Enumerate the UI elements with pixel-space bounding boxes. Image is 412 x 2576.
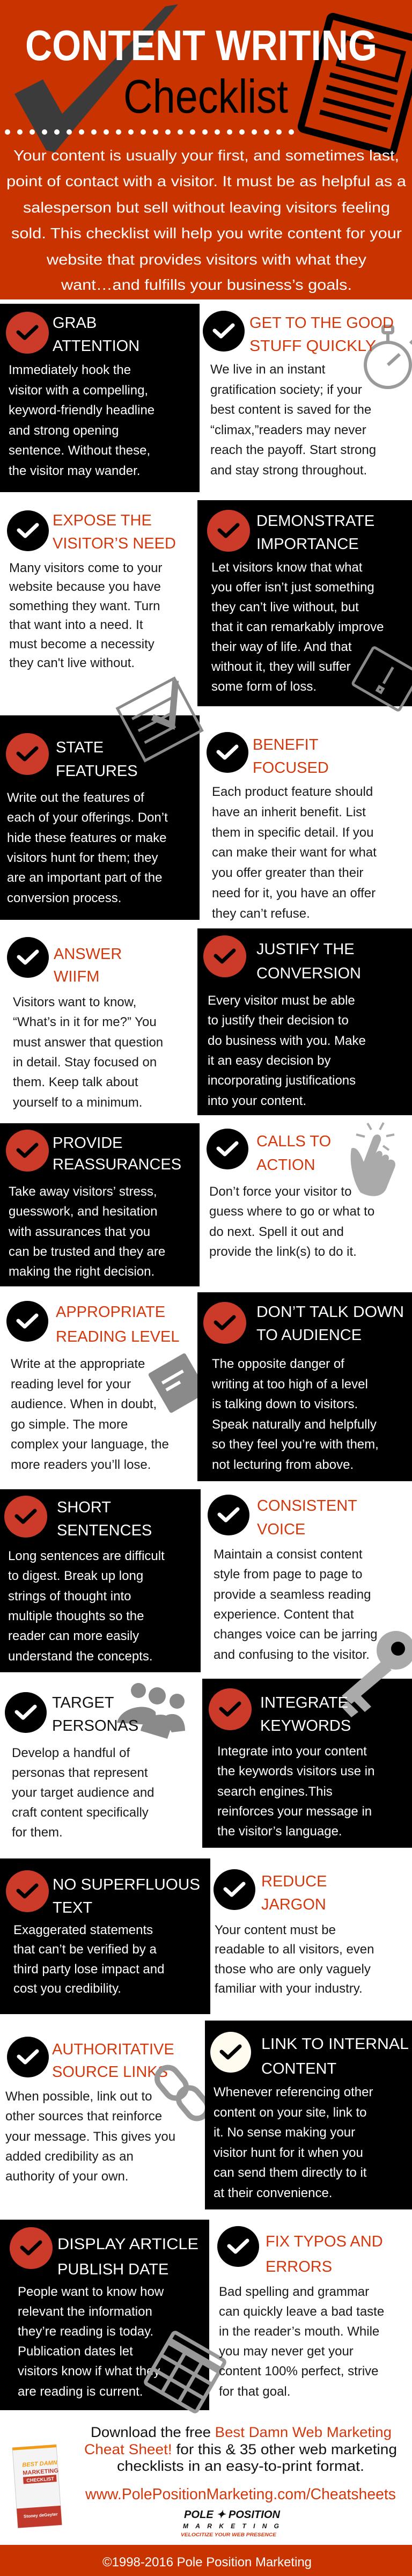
logo: VELOCITIZE YOUR WEB PRESENCE bbox=[181, 2532, 277, 2537]
panel: no superfluous text: third party lose impact and bbox=[13, 1962, 164, 1977]
panel: fix typos and errors: content 100% perfect, strive bbox=[219, 2364, 379, 2379]
panel: calls to action: Don’t force your visitor to bbox=[209, 1184, 351, 1199]
panel: answer wiifm: WIIFM bbox=[54, 968, 99, 985]
panel: fix typos and errors: FIX TYPOS AND bbox=[266, 2233, 383, 2250]
panel: answer wiifm: yourself to a minimum. bbox=[13, 1095, 142, 1110]
panel: fix typos and errors: in the reader’s mouth. While bbox=[219, 2324, 379, 2339]
panel: target personas: your target audience and bbox=[12, 1785, 154, 1800]
panel: don't talk down to audience: is talking down to visitors. bbox=[212, 1397, 358, 1411]
panel: link to internal content: LINK TO INTERNAL bbox=[261, 2036, 409, 2053]
panel: link to internal content: CONTENT bbox=[261, 2060, 336, 2077]
panel: integrate keywords: the visitor’s language. bbox=[217, 1824, 342, 1839]
panel: provide reassurances: with assurances that you bbox=[8, 1225, 150, 1239]
panel: appropriate reading level: audience. When in doubt, bbox=[11, 1397, 157, 1411]
panel: justify the conversion bbox=[197, 928, 412, 1115]
panel: state features: visitors hunt for them; they bbox=[7, 851, 158, 865]
panel: short sentences: Long sentences are difficult bbox=[8, 1549, 165, 1563]
panel: authoritative source links: authority of your own. bbox=[5, 2169, 128, 2184]
panel: short sentences: to digest. Break up long bbox=[8, 1569, 143, 1583]
intro text: want…and fulfills your business’s goals. bbox=[61, 276, 352, 293]
panel: short sentences: SHORT bbox=[57, 1499, 111, 1516]
panel: integrate keywords: the keywords visitors use in bbox=[217, 1764, 374, 1779]
panel: short sentences: SENTENCES bbox=[57, 1522, 152, 1539]
panel: reduce jargon bbox=[214, 1869, 374, 1996]
panel: state features: Write out the features of bbox=[7, 791, 144, 805]
panel: link to internal content bbox=[205, 2021, 412, 2209]
panel: don't talk down to audience bbox=[197, 1292, 412, 1481]
panel: appropriate reading level: more readers you’ll lose. bbox=[11, 1458, 151, 1472]
panel: fix typos and errors: ERRORS bbox=[266, 2258, 332, 2275]
panel: authoritative source links bbox=[5, 2037, 212, 2184]
panel: target personas: for them. bbox=[12, 1825, 63, 1840]
panel: integrate keywords: Integrate into your content bbox=[217, 1744, 367, 1759]
icon: people bbox=[117, 1683, 185, 1739]
panel: consistent voice: Maintain a consist content bbox=[214, 1547, 363, 1562]
panel: link to internal content: at their convenience. bbox=[214, 2186, 332, 2200]
panel: grab attention: sentence. Without these, bbox=[9, 443, 150, 458]
panel: demonstrate importance: DEMONSTRATE bbox=[256, 513, 374, 530]
panel: justify the conversion: to justify their decision to bbox=[208, 1013, 349, 1028]
panel: state features: each of your offerings. Don’t bbox=[7, 810, 168, 825]
panel: no superfluous text bbox=[0, 1858, 210, 2014]
panel: appropriate reading level bbox=[6, 1301, 208, 1472]
panel: display article publish date: relevant the information bbox=[18, 2304, 152, 2319]
call to action text: Download the free Best Damn Web Marketing bbox=[91, 2424, 392, 2440]
panel: appropriate reading level: complex your language, the bbox=[11, 1437, 169, 1452]
panel: benefit focused: they can’t refuse. bbox=[212, 906, 310, 921]
panel: answer wiifm bbox=[7, 937, 163, 1110]
panel: get to the good stuff quickly bbox=[203, 311, 412, 478]
intro text: website that provides visitors with what they bbox=[46, 251, 366, 268]
panel: provide reassurances: can be trusted and they are bbox=[9, 1245, 165, 1259]
intro text: sold. This checklist will help you write content for your bbox=[11, 225, 402, 241]
panel: grab attention: GRAB bbox=[53, 314, 97, 332]
icon: pointing hand bbox=[351, 1123, 395, 1196]
panel: link to internal content: Whenever referencing other bbox=[214, 2085, 373, 2099]
panel: answer wiifm: must answer that question bbox=[13, 1035, 163, 1050]
call to action text: Cheat Sheet! for this & 35 other web marketing bbox=[84, 2441, 397, 2457]
panel: appropriate reading level: go simple. The more bbox=[11, 1417, 128, 1432]
panel: integrate keywords: KEYWORDS bbox=[260, 1717, 351, 1735]
panel: benefit focused: need for it, you have an offer bbox=[212, 886, 376, 901]
panel: grab attention: and strong opening bbox=[9, 423, 119, 438]
panel: no superfluous text: cost you credibility. bbox=[13, 1981, 121, 1996]
icon: paper with check bbox=[117, 678, 202, 760]
panel: authoritative source links: other sources that reinforce bbox=[5, 2109, 162, 2124]
panel: get to the good stuff quickly: We live in an instant bbox=[210, 362, 326, 377]
panel: get to the good stuff quickly: best content is saved for the bbox=[210, 402, 371, 417]
footer bbox=[0, 2545, 412, 2576]
panel: benefit focused: Each product feature should bbox=[212, 785, 373, 799]
panel: don't talk down to audience: Speak naturally and helpfully bbox=[212, 1417, 377, 1432]
panel: fix typos and errors: you may never get your bbox=[219, 2344, 354, 2359]
icon: book cover: CHECKLIST bbox=[26, 2476, 55, 2483]
panel: display article publish date: are reading is current. bbox=[18, 2384, 143, 2399]
panel: reduce jargon: those who are only vaguely bbox=[215, 1962, 371, 1977]
panel: benefit focused: them in specific detail. If you bbox=[212, 825, 373, 840]
call to action text bbox=[84, 2424, 397, 2474]
panel: don't talk down to audience: The opposite danger of bbox=[212, 1357, 344, 1371]
panel: answer wiifm: “What’s in it for me?” You bbox=[13, 1015, 157, 1029]
icon: book bbox=[148, 1352, 208, 1414]
panel: consistent voice: experience. Content that bbox=[214, 1607, 354, 1622]
panel: expose the visitor's need: EXPOSE THE bbox=[53, 512, 152, 529]
panel: short sentences: strings of thought into bbox=[8, 1589, 131, 1604]
panel: get to the good stuff quickly: reach the payoff. Start strong bbox=[210, 443, 376, 457]
header panel bbox=[0, 0, 412, 299]
panel: grab attention bbox=[0, 304, 200, 492]
panel: appropriate reading level: Write at the appropriate bbox=[11, 1357, 145, 1371]
panel: short sentences bbox=[0, 1489, 201, 1672]
panel: authoritative source links: added credibility as an bbox=[5, 2149, 134, 2164]
panel: no superfluous text: that can’t be verified by a bbox=[13, 1942, 157, 1957]
panel: consistent voice: changes voice can be jarring bbox=[214, 1627, 378, 1642]
panel: get to the good stuff quickly: gratification society; if your bbox=[210, 383, 362, 397]
panel: short sentences: multiple thoughts so the bbox=[8, 1609, 144, 1623]
panel: demonstrate importance: they can’t live without, but bbox=[211, 600, 359, 614]
panel: calls to action: provide the link(s) to do it. bbox=[209, 1245, 357, 1259]
panel: demonstrate importance: some form of loss. bbox=[211, 679, 317, 694]
panel: expose the visitor's need: Many visitors come to your bbox=[9, 561, 162, 575]
panel: demonstrate importance: you offer isn’t just something bbox=[211, 580, 374, 595]
panel: no superfluous text: Exaggerated statements bbox=[13, 1923, 153, 1937]
icon: warning card bbox=[352, 647, 412, 711]
panel: authoritative source links: AUTHORITATIVE bbox=[52, 2041, 174, 2058]
panel: benefit focused bbox=[207, 732, 377, 921]
panel: display article publish date: PUBLISH DATE bbox=[57, 2261, 168, 2278]
panel: provide reassurances: making the right decision. bbox=[9, 1264, 154, 1279]
panel: get to the good stuff quickly: and stay strong throughout. bbox=[210, 463, 367, 478]
panel: state features: FEATURES bbox=[56, 763, 138, 780]
panel: provide reassurances: guesswork, and hesitation bbox=[9, 1204, 158, 1219]
panel: justify the conversion: into your content. bbox=[208, 1094, 306, 1108]
panel: link to internal content: can send them directly to it bbox=[214, 2165, 367, 2180]
panel: grab attention: ATTENTION bbox=[53, 338, 139, 355]
panel: grab attention: Immediately hook the bbox=[9, 363, 131, 377]
panel: no superfluous text: TEXT bbox=[53, 1899, 92, 1916]
panel: calls to action: guess where to go or what to bbox=[209, 1204, 374, 1219]
panel: target personas: Develop a handful of bbox=[12, 1746, 130, 1760]
icon: book cover: MARKETING bbox=[23, 2468, 58, 2477]
panel: authoritative source links: SOURCE LINKS bbox=[52, 2063, 168, 2081]
title bbox=[25, 21, 377, 123]
panel: consistent voice: VOICE bbox=[257, 1521, 305, 1538]
panel: don't talk down to audience: TO AUDIENCE bbox=[256, 1327, 362, 1344]
panel: target personas: TARGET bbox=[52, 1694, 114, 1711]
panel: reduce jargon: familiar with your industry. bbox=[215, 1981, 363, 1996]
panel: justify the conversion: Every visitor must be able bbox=[208, 993, 355, 1008]
panel: answer wiifm: ANSWER bbox=[54, 946, 122, 963]
panel: short sentences: understand the concepts. bbox=[8, 1649, 153, 1664]
panel: state features: conversion process. bbox=[7, 891, 121, 905]
panel: reduce jargon: Your content must be bbox=[215, 1923, 336, 1937]
panel: provide reassurances: REASSURANCES bbox=[53, 1156, 181, 1173]
icon: book cover bbox=[12, 2445, 62, 2528]
icon: big checkmark bbox=[14, 4, 178, 152]
panel: justify the conversion: JUSTIFY THE bbox=[256, 941, 355, 958]
panel: state features: hide these features or make bbox=[7, 831, 167, 845]
panel: get to the good stuff quickly: “climax,”readers may never bbox=[210, 423, 366, 437]
panel: state features: STATE bbox=[56, 739, 104, 756]
panel: display article publish date bbox=[0, 2220, 225, 2412]
panel: no superfluous text: NO SUPERFLUOUS bbox=[53, 1876, 200, 1893]
panel: justify the conversion: do business with you. Make bbox=[208, 1034, 366, 1048]
panel: don't talk down to audience: DON’T TALK DOWN bbox=[256, 1304, 404, 1321]
panel: state features bbox=[0, 678, 202, 920]
panel: target personas: personas that represent bbox=[12, 1766, 148, 1780]
panel: answer wiifm: Visitors want to know, bbox=[13, 995, 136, 1009]
panel: demonstrate importance: Let visitors know that what bbox=[211, 560, 363, 575]
panel: expose the visitor's need: must become a necessity bbox=[9, 637, 154, 652]
panel: state features: are an important part of the bbox=[7, 870, 162, 885]
panel: provide reassurances: Take away visitors’ stress, bbox=[9, 1184, 157, 1199]
panel: authoritative source links: your message. This gives you bbox=[5, 2129, 175, 2144]
panel: consistent voice: and confusing to the visitor. bbox=[214, 1648, 370, 1662]
panel: benefit focused: FOCUSED bbox=[253, 759, 329, 777]
logo bbox=[181, 2509, 281, 2537]
panel: consistent voice bbox=[208, 1495, 378, 1662]
panel: integrate keywords: reinforces your message in bbox=[217, 1804, 372, 1819]
panel: authoritative source links: When possible, link out to bbox=[5, 2089, 152, 2104]
intro text bbox=[6, 147, 406, 293]
panel: provide reassurances: PROVIDE bbox=[53, 1135, 123, 1152]
logo: MARKETING bbox=[183, 2522, 279, 2530]
panel: don't talk down to audience: so they feel you’re with them, bbox=[212, 1437, 379, 1452]
panel: expose the visitor's need: VISITOR’S NEED bbox=[53, 535, 176, 552]
panel: calls to action: ACTION bbox=[256, 1157, 315, 1174]
panel: expose the visitor's need: something they want. Turn bbox=[9, 599, 160, 613]
panel: don't talk down to audience: writing at too high of a level bbox=[211, 1377, 368, 1392]
panel: link to internal content: visitor hunt for it when you bbox=[214, 2146, 363, 2160]
panel: get to the good stuff quickly: STUFF QUICKLY bbox=[249, 338, 376, 355]
panel: get to the good stuff quickly: GET TO THE GOOD bbox=[249, 314, 394, 332]
icon: book cover: Stoney deGeyter bbox=[24, 2512, 58, 2519]
panel: don't talk down to audience: not lecturing from above. bbox=[212, 1458, 354, 1472]
icon: key bbox=[341, 1631, 412, 1717]
panel: target personas: PERSONAS bbox=[52, 1717, 138, 1735]
panel: appropriate reading level: reading level for your bbox=[11, 1377, 131, 1392]
panel: integrate keywords bbox=[202, 1631, 412, 1848]
panel: expose the visitor's need: that want into a need. It bbox=[9, 618, 143, 632]
panel: reduce jargon: readable to all visitors, even bbox=[215, 1942, 374, 1957]
footer: ©1998-2016 Pole Position Marketing bbox=[102, 2555, 312, 2570]
panel: target personas bbox=[5, 1683, 185, 1840]
icon: document bbox=[300, 16, 412, 153]
panel: provide reassurances bbox=[0, 1123, 200, 1286]
panel: link to internal content: content on your site, link to bbox=[214, 2105, 367, 2120]
intro text: salesperson but sell without leaving visitors feeling bbox=[23, 199, 390, 216]
panel: display article publish date: DISPLAY ARTICLE bbox=[57, 2236, 198, 2253]
panel: answer wiifm: them. Keep talk about bbox=[13, 1075, 138, 1089]
panel: expose the visitor's need bbox=[7, 510, 176, 670]
panel: justify the conversion: incorporating justifications bbox=[208, 1073, 356, 1088]
panel: target personas: craft content specifically bbox=[12, 1805, 149, 1820]
panel: short sentences: reader can more easily bbox=[8, 1629, 139, 1643]
panel: calls to action: CALLS TO bbox=[256, 1133, 331, 1150]
panel: benefit focused: BENEFIT bbox=[253, 736, 319, 753]
icon: book cover: BEST DAMN bbox=[22, 2460, 58, 2469]
panel: grab attention: the visitor may wander. bbox=[9, 464, 140, 478]
dotted divider bbox=[5, 129, 294, 135]
panel: integrate keywords: INTEGRATE bbox=[260, 1694, 348, 1711]
intro text: Your content is usually your first, and sometimes last, bbox=[13, 147, 399, 164]
panel: integrate keywords: search engines.This bbox=[217, 1784, 333, 1799]
panel: benefit focused: you offer greater than their bbox=[212, 866, 363, 880]
panel: consistent voice: provide a seamless reading bbox=[214, 1587, 371, 1602]
panel: fix typos and errors: Bad spelling and grammar bbox=[219, 2285, 369, 2299]
panel: expose the visitor's need: they can't live without. bbox=[9, 656, 135, 670]
panel: fix typos and errors bbox=[217, 2226, 384, 2399]
panel: demonstrate importance: IMPORTANCE bbox=[256, 536, 359, 553]
intro text: point of contact with a visitor. It must be as helpful as a bbox=[6, 173, 406, 189]
icon: stopwatch bbox=[365, 326, 412, 387]
panel: expose the visitor's need: website because you have bbox=[9, 580, 161, 594]
panel: demonstrate importance bbox=[197, 500, 412, 711]
panel: justify the conversion: CONVERSION bbox=[256, 965, 361, 982]
panel: grab attention: keyword-friendly headline bbox=[9, 403, 154, 418]
panel: fix typos and errors: can quickly leave a bad taste bbox=[219, 2304, 384, 2319]
panel: appropriate reading level: READING LEVEL bbox=[56, 1328, 179, 1345]
panel: display article publish date: visitors know if what they bbox=[18, 2364, 160, 2379]
panel: calls to action: do next. Spell it out and bbox=[209, 1225, 344, 1239]
logo: POLE ✦ POSITION bbox=[184, 2509, 281, 2521]
panel: display article publish date: they’re reading is today. bbox=[18, 2324, 153, 2339]
panel: appropriate reading level: APPROPRIATE bbox=[56, 1304, 165, 1321]
panel: grab attention: visitor with a compelling, bbox=[9, 383, 148, 398]
panel: calls to action bbox=[207, 1123, 395, 1259]
panel: display article publish date: People want to know how bbox=[18, 2285, 164, 2299]
panel: demonstrate importance: that it can remarkably improve bbox=[211, 620, 384, 634]
panel: demonstrate importance: their way of life. And that bbox=[211, 640, 352, 654]
panel: answer wiifm: in detail. Stay focused on bbox=[13, 1055, 157, 1070]
title: Checklist bbox=[123, 70, 288, 123]
panel: justify the conversion: it an easy decision by bbox=[208, 1053, 330, 1068]
url: www.PolePositionMarketing.com/Cheatsheets bbox=[85, 2486, 396, 2503]
icon: calendar bbox=[145, 2332, 225, 2412]
panel: fix typos and errors: for that goal. bbox=[219, 2384, 290, 2399]
panel: demonstrate importance: without it, they will suffer bbox=[211, 660, 351, 674]
panel: consistent voice: CONSISTENT bbox=[257, 1497, 357, 1514]
panel: display article publish date: Publication dates let bbox=[18, 2344, 133, 2359]
call to action text: checklists in an easy-to-print format. bbox=[117, 2458, 364, 2474]
panel: consistent voice: style from page to page to bbox=[214, 1567, 363, 1582]
panel: benefit focused: have an inherit benefit. List bbox=[212, 805, 366, 819]
panel: reduce jargon: REDUCE bbox=[261, 1873, 327, 1890]
panel: benefit focused: can make their want for what bbox=[212, 845, 377, 860]
panel: reduce jargon: JARGON bbox=[261, 1896, 326, 1913]
panel: link to internal content: it. No sense making your bbox=[214, 2125, 355, 2140]
icon: chain link bbox=[153, 2063, 212, 2123]
